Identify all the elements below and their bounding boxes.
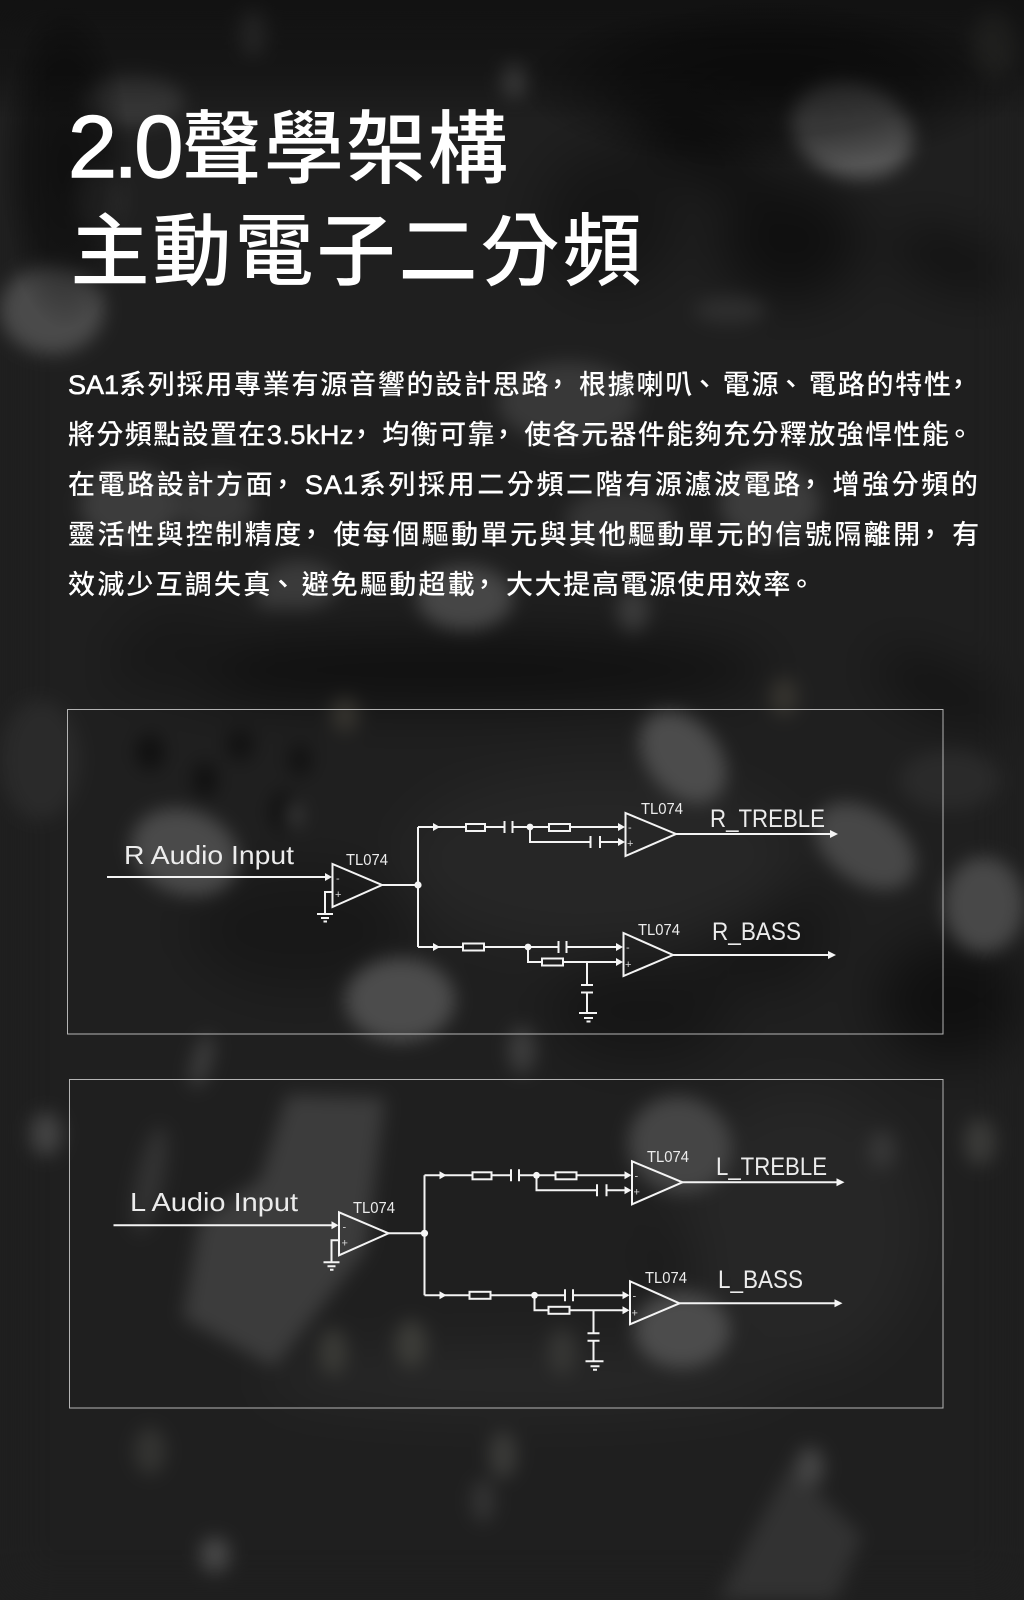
ground: input stage <box>324 1240 340 1270</box>
op amp: bass: TL074 <box>638 922 680 939</box>
label: R Audio Input: R Audio Input <box>124 840 295 870</box>
title: 2.0聲學架構 <box>68 97 510 196</box>
op amp: bass: + <box>632 1307 638 1319</box>
body paragraph: 在電路設計方面，SA1系列採用二分頻二階有源濾波電路，增強分頻的 <box>68 463 980 502</box>
op amp: input stage <box>332 852 388 907</box>
output: R_TREBLE: R_TREBLE <box>710 805 825 833</box>
op amp: bass <box>630 1270 687 1324</box>
op amp: treble <box>626 801 683 856</box>
op amp: bass: TL074 <box>645 1270 687 1287</box>
op amp: treble: - <box>628 822 632 834</box>
output: R_TREBLE <box>676 805 838 838</box>
treble filter <box>424 1169 632 1196</box>
panel: right channel circuit <box>68 710 943 1034</box>
op amp: treble: + <box>634 1186 640 1198</box>
output: L_TREBLE <box>682 1153 844 1186</box>
output: R_BASS <box>673 918 836 959</box>
op amp: bass: + <box>625 959 631 971</box>
op amp: treble <box>632 1149 689 1204</box>
panel: left channel circuit <box>70 1080 943 1408</box>
op amp: treble: TL074 <box>647 1149 689 1166</box>
output: L_BASS: L_BASS <box>718 1266 803 1294</box>
splitter wire <box>388 1175 428 1295</box>
body paragraph <box>68 363 982 602</box>
output: L_TREBLE: L_TREBLE <box>716 1153 827 1181</box>
title <box>68 97 644 296</box>
op amp: treble: TL074 <box>641 801 683 818</box>
op amp: bass: - <box>632 1290 636 1302</box>
output: R_BASS: R_BASS <box>712 918 801 946</box>
splitter wire <box>382 827 422 947</box>
body paragraph: 效減少互調失真、避免驅動超載，大大提高電源使用效率。 <box>68 563 817 602</box>
op amp: input stage <box>339 1200 395 1255</box>
op amp: input stage: TL074 <box>346 852 388 869</box>
treble filter <box>418 821 625 848</box>
output: L_BASS <box>680 1266 842 1307</box>
op amp: input stage: - <box>336 873 340 885</box>
op amp: input stage: + <box>335 889 341 901</box>
op amp: bass <box>624 922 680 976</box>
body paragraph: SA1系列採用專業有源音響的設計思路，根據喇叭、電源、電路的特性， <box>68 363 974 402</box>
op amp: input stage: + <box>342 1237 348 1249</box>
op amp: input stage: - <box>342 1221 346 1233</box>
label: L Audio Input: L Audio Input <box>130 1187 299 1217</box>
input wire <box>107 873 332 881</box>
body paragraph: 靈活性與控制精度，使每個驅動單元與其他驅動單元的信號隔離開，有 <box>68 513 982 552</box>
op amp: input stage: TL074 <box>353 1200 395 1217</box>
input wire <box>114 1221 338 1229</box>
body paragraph: 將分頻點設置在3.5kHz，均衡可靠，使各元器件能夠充分釋放強悍性能。 <box>68 413 975 452</box>
op amp: treble: + <box>627 838 633 850</box>
bass filter <box>418 941 623 1022</box>
title: 主動電子二分頻 <box>70 207 644 296</box>
op amp: treble: - <box>634 1170 638 1182</box>
ground: input stage <box>317 892 333 922</box>
bass filter <box>424 1289 630 1370</box>
op amp: bass: - <box>626 942 630 954</box>
